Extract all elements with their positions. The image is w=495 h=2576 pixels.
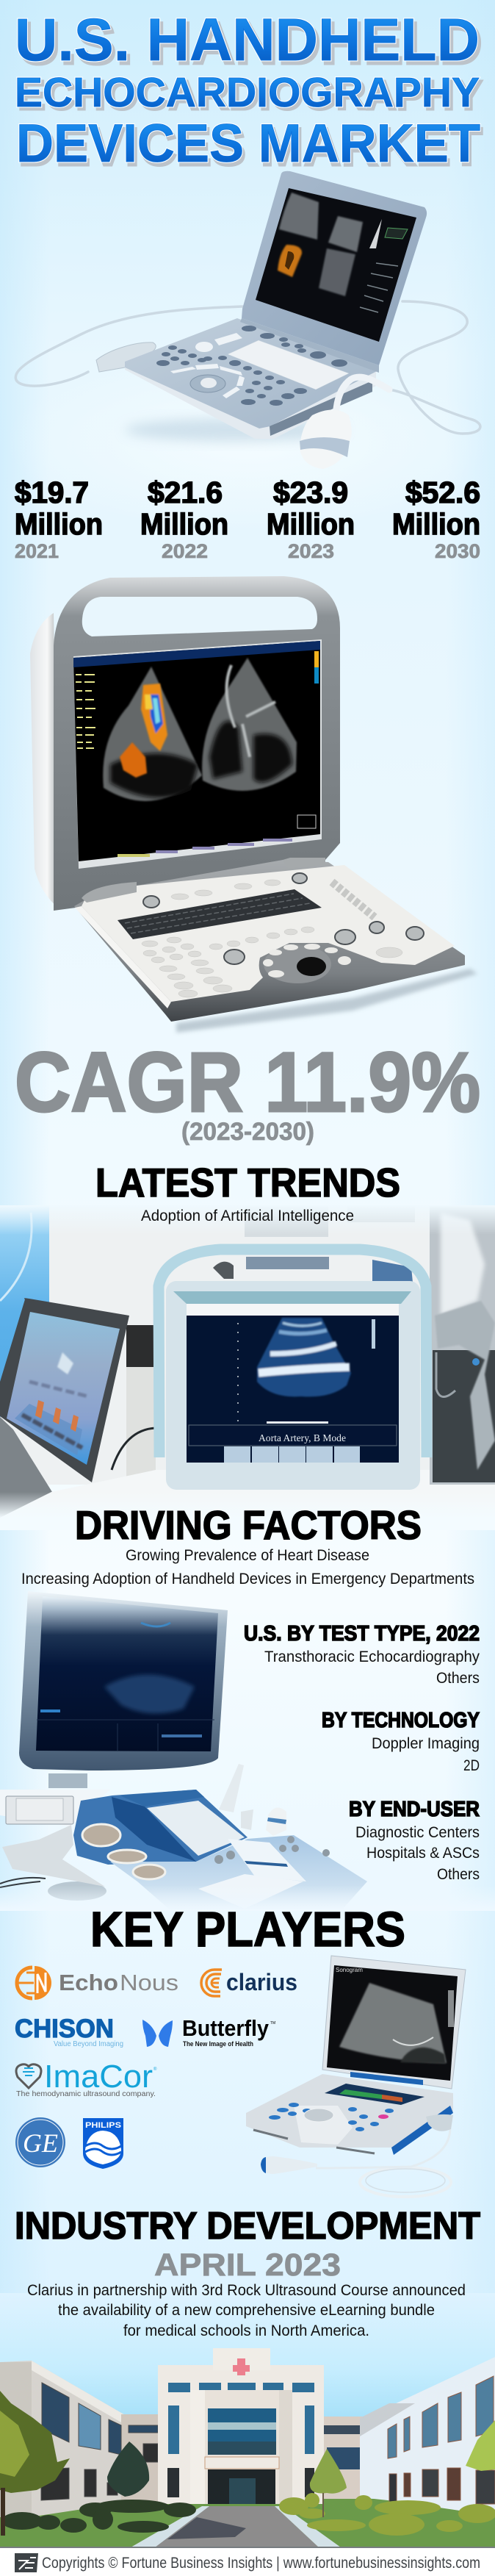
pedestal [48, 1881, 106, 1901]
dark keyboard [118, 889, 322, 939]
hedges right [279, 2493, 495, 2536]
heading: key players: KEY PLAYERS [90, 1902, 405, 1957]
illustration: compact ultrasound with probe: Sonogram [336, 1967, 363, 1973]
dark counter behind [126, 1325, 156, 1367]
title line 3: DEVICES MARKET [16, 114, 480, 173]
segment: end-user: BY END-USER [349, 1798, 480, 1821]
title line 1: U.S. HANDHELD [15, 7, 480, 73]
logo: Philips: PHILIPS [85, 2121, 121, 2130]
cable [0, 1878, 46, 1887]
colour display [325, 2084, 424, 2105]
aorta caption: Aorta Artery, B Mode [259, 1433, 346, 1444]
lid [242, 171, 427, 365]
right connection [324, 2417, 364, 2499]
control knobs [143, 873, 424, 964]
value 2022: Million [140, 507, 228, 541]
footer [0, 2548, 495, 2576]
heading: driving factors: DRIVING FACTORS [75, 1502, 422, 1548]
laptop corner at lower left [0, 1417, 52, 1518]
segment: technology [322, 1709, 480, 1774]
title line 1: U.S. HANDHELD [18, 10, 483, 77]
driver 2: Increasing Adoption of Handheld Devices in Emergency Departments [21, 1571, 474, 1587]
depth dots and scale [237, 1323, 239, 1422]
title line 2: ECHOCARDIOGRAPHY [15, 69, 480, 116]
driver 1: Growing Prevalence of Heart Disease [126, 1547, 369, 1564]
console touch screen [147, 1801, 245, 1856]
title line 3: DEVICES MARKET [16, 114, 480, 173]
room background [0, 1205, 495, 1485]
logo: Clarius [201, 1969, 297, 1996]
caption panel [189, 1425, 397, 1446]
monitor screen [36, 1596, 218, 1751]
segment: test type: Transthoracic Echocardiography [264, 1648, 480, 1665]
segment: test type: U.S. BY TEST TYPE, 2022 [244, 1622, 480, 1646]
paper printout [228, 1839, 306, 1881]
entrance canopy [205, 2457, 279, 2469]
value 2030: Million [392, 507, 480, 541]
cable coil [360, 2167, 451, 2197]
main monitor screen [187, 1304, 399, 1463]
illustration: cart ultrasound [0, 1591, 495, 1911]
probe [300, 377, 389, 469]
white keypad [198, 1874, 303, 1909]
probe [261, 2156, 317, 2174]
logo: Chison: Value Beyond Imaging [54, 2040, 123, 2048]
screen bezel [73, 639, 322, 869]
value 2021: $19.7 [15, 476, 89, 509]
drive shelf [0, 1790, 110, 1826]
trend text: Adoption of Artificial Intelligence [141, 1208, 354, 1224]
white controls [170, 333, 245, 398]
long probe [219, 1764, 244, 1812]
left large tree [0, 2391, 70, 2536]
table [0, 1470, 495, 1529]
logo: Butterfly: The New Image of Health [183, 2040, 253, 2048]
hinge [240, 318, 379, 373]
monitor stand [48, 1773, 87, 1788]
logo: ImaCor: ® [153, 2067, 157, 2072]
left white lip [75, 906, 171, 1008]
trackball keys [263, 944, 351, 977]
keyboard base rim [74, 860, 465, 1022]
console holder [2, 1825, 105, 1887]
probe cables [15, 301, 480, 434]
blue keys [269, 2103, 394, 2131]
heading: latest trends: LATEST TRENDS [95, 1160, 400, 1205]
logo: Chison: CHISON [15, 2014, 114, 2043]
logo: EchoNous: Echo [59, 1970, 118, 1995]
ground [0, 2499, 495, 2547]
title line 3: DEVICES MARKET [18, 118, 483, 177]
red cross [233, 2358, 250, 2375]
left connection [121, 2414, 158, 2503]
cable to device [316, 2120, 450, 2168]
illustration: portable color doppler ultrasound [30, 576, 477, 1033]
fade to page at bottom [0, 1492, 495, 1518]
title line 2: ECHOCARDIOGRAPHY [18, 72, 483, 119]
CAGR period: (2023-2030) [181, 1118, 314, 1146]
heading: industry development: INDUSTRY DEVELOPMENT [15, 2205, 480, 2247]
panel: company logos [15, 1966, 297, 2169]
console dark panel [112, 1797, 196, 1862]
side panel [30, 613, 59, 908]
entrance doors [208, 2469, 275, 2504]
title line 2: ECHOCARDIOGRAPHY [15, 69, 480, 116]
photo bottom rule [0, 2547, 495, 2548]
development text: Clarius in partnership with 3rd Rock Ultrasound Course announced [27, 2282, 466, 2299]
on-screen buttons [224, 1446, 360, 1463]
segment: test type [244, 1622, 480, 1687]
right wing windows [388, 2376, 495, 2504]
development text: the availability of a new comprehensive eLearning bundle [58, 2302, 435, 2319]
segment: end-user: Others [437, 1866, 480, 1883]
hinge pads [82, 882, 137, 903]
white surface [82, 865, 455, 1002]
left monitor [0, 1298, 129, 1482]
panel: market segments [244, 1622, 480, 1883]
footer logo [15, 2553, 38, 2572]
screen status rows [40, 1709, 60, 1712]
value 2022 [140, 476, 228, 562]
keyboard [228, 340, 349, 390]
left fan [103, 667, 202, 801]
value 2023 [267, 476, 355, 562]
logo: Clarius: clarius [226, 1969, 297, 1995]
base white lip [125, 364, 376, 439]
segment: test type: Others [436, 1670, 480, 1687]
segment: technology: Doppler Imaging [372, 1735, 480, 1752]
segment: end-user: Diagnostic Centers [355, 1824, 480, 1841]
value 2030: 2030 [435, 540, 480, 562]
screen [327, 1965, 458, 2081]
title [15, 7, 483, 177]
upper windows [168, 2383, 314, 2454]
screen [73, 641, 320, 861]
panel buttons [156, 326, 347, 406]
logo: ImaCor: The hemodynamic ultrasound company. [16, 2090, 156, 2098]
items seen through handle [213, 1257, 413, 1282]
console keyboard area [110, 1835, 367, 1911]
value 2030 [392, 476, 480, 562]
left wing windows [41, 2383, 158, 2500]
value 2023: $23.9 [273, 476, 348, 509]
left probe [96, 342, 156, 372]
logo: Butterfly: TM [270, 2021, 275, 2026]
logo: Philips [83, 2118, 123, 2169]
illustration: compact ultrasound with probe [246, 1956, 466, 2197]
segment: technology: 2D [463, 1757, 480, 1774]
speaker grille [270, 381, 372, 436]
main monitor body [166, 1281, 420, 1490]
photo: hospital building [0, 2293, 495, 2548]
blue wall at left [0, 1205, 49, 1418]
segment: end-user: Hospitals & ASCs [366, 1845, 480, 1862]
main monitor handle [159, 1249, 427, 1457]
connector probe [426, 2114, 453, 2131]
logo: EchoNous: Nous [120, 1970, 178, 1995]
right foliage [466, 2420, 495, 2471]
upright probes [266, 1808, 286, 1836]
value 2030: $52.6 [405, 476, 480, 509]
screen images [278, 193, 408, 312]
knobs [214, 1836, 330, 1864]
value 2021: 2021 [15, 540, 59, 562]
handle opening [82, 597, 317, 636]
fade to page at top [0, 1205, 495, 1235]
small keys [142, 880, 402, 997]
road shadow [167, 2517, 246, 2539]
equipment behind at right [430, 1205, 495, 1485]
value 2022: 2022 [162, 540, 208, 562]
trackball [304, 2109, 333, 2122]
right wing [360, 2357, 495, 2516]
title line 1: U.S. HANDHELD [15, 7, 480, 73]
probe holders [82, 1824, 165, 1879]
value 2021 [15, 476, 103, 562]
fade into key players [0, 1885, 495, 1911]
connecting cable [112, 1428, 156, 1470]
segment: end-user [349, 1798, 480, 1883]
sidewalks [131, 2506, 209, 2547]
wall logo arc [0, 1213, 32, 1301]
dark tree [107, 2442, 149, 2497]
lid hinge bar [350, 2072, 423, 2085]
keyboard base shadow [176, 969, 477, 1033]
console top bar [120, 1790, 204, 1807]
console blue housing [73, 1790, 248, 1865]
centre tower [158, 2365, 324, 2504]
logo: Butterfly: Butterfly [182, 2015, 270, 2041]
scan parameter text [76, 675, 97, 748]
penthouse [213, 2348, 270, 2370]
logo: Butterfly [142, 2015, 275, 2048]
base shadow [125, 418, 345, 442]
sky [0, 2293, 495, 2547]
logo: ImaCor [16, 2059, 157, 2098]
photo: clinical ultrasound monitors [0, 1205, 495, 1530]
roadway [155, 2506, 319, 2547]
value 2023: Million [267, 507, 355, 541]
market values row [15, 476, 480, 562]
scan image [339, 1983, 447, 2063]
value 2023: 2023 [288, 540, 334, 562]
development date: APRIL 2023 [154, 2247, 341, 2283]
development text [27, 2282, 466, 2339]
lower dark openings [167, 2468, 314, 2497]
hedges left [1, 2500, 196, 2533]
trackball [190, 375, 225, 392]
monitor top bevel [173, 1291, 411, 1304]
speaker grilles [253, 2130, 375, 2153]
portal columns [190, 2390, 292, 2504]
illustration: portable ultrasound laptop [15, 171, 480, 469]
right fan [202, 658, 297, 791]
trackball panel [264, 945, 331, 983]
blue side trim [391, 2106, 453, 2155]
colour scale [314, 651, 319, 684]
slider bank [332, 882, 375, 917]
trackball [297, 957, 326, 976]
logo: GE: GE [23, 2128, 58, 2158]
screen title strip [187, 1304, 399, 1316]
colour doppler flow [120, 684, 167, 778]
wall panels behind [245, 1205, 328, 1237]
logo: EchoNous [17, 1966, 178, 2000]
base [246, 2074, 453, 2148]
scan arc [104, 1674, 195, 1713]
right small tree [310, 2449, 347, 2494]
logo: GE [15, 2117, 65, 2167]
screen [256, 188, 416, 342]
monitor frame [19, 1591, 228, 1770]
lid [322, 1956, 466, 2089]
central glazing [208, 2408, 276, 2455]
aorta scan [257, 1318, 351, 1396]
pink key [378, 2114, 389, 2119]
monitor body [54, 576, 340, 911]
value 2022: $21.6 [148, 476, 223, 509]
base highlight [294, 2106, 353, 2145]
screen soft keys [118, 839, 292, 857]
development text: for medical schools in North America. [123, 2322, 369, 2339]
logo: ImaCor: ImaCor [44, 2059, 153, 2095]
base top [125, 318, 377, 428]
value 2021: Million [15, 507, 103, 541]
screen top band [73, 641, 320, 667]
left wing [0, 2361, 126, 2517]
